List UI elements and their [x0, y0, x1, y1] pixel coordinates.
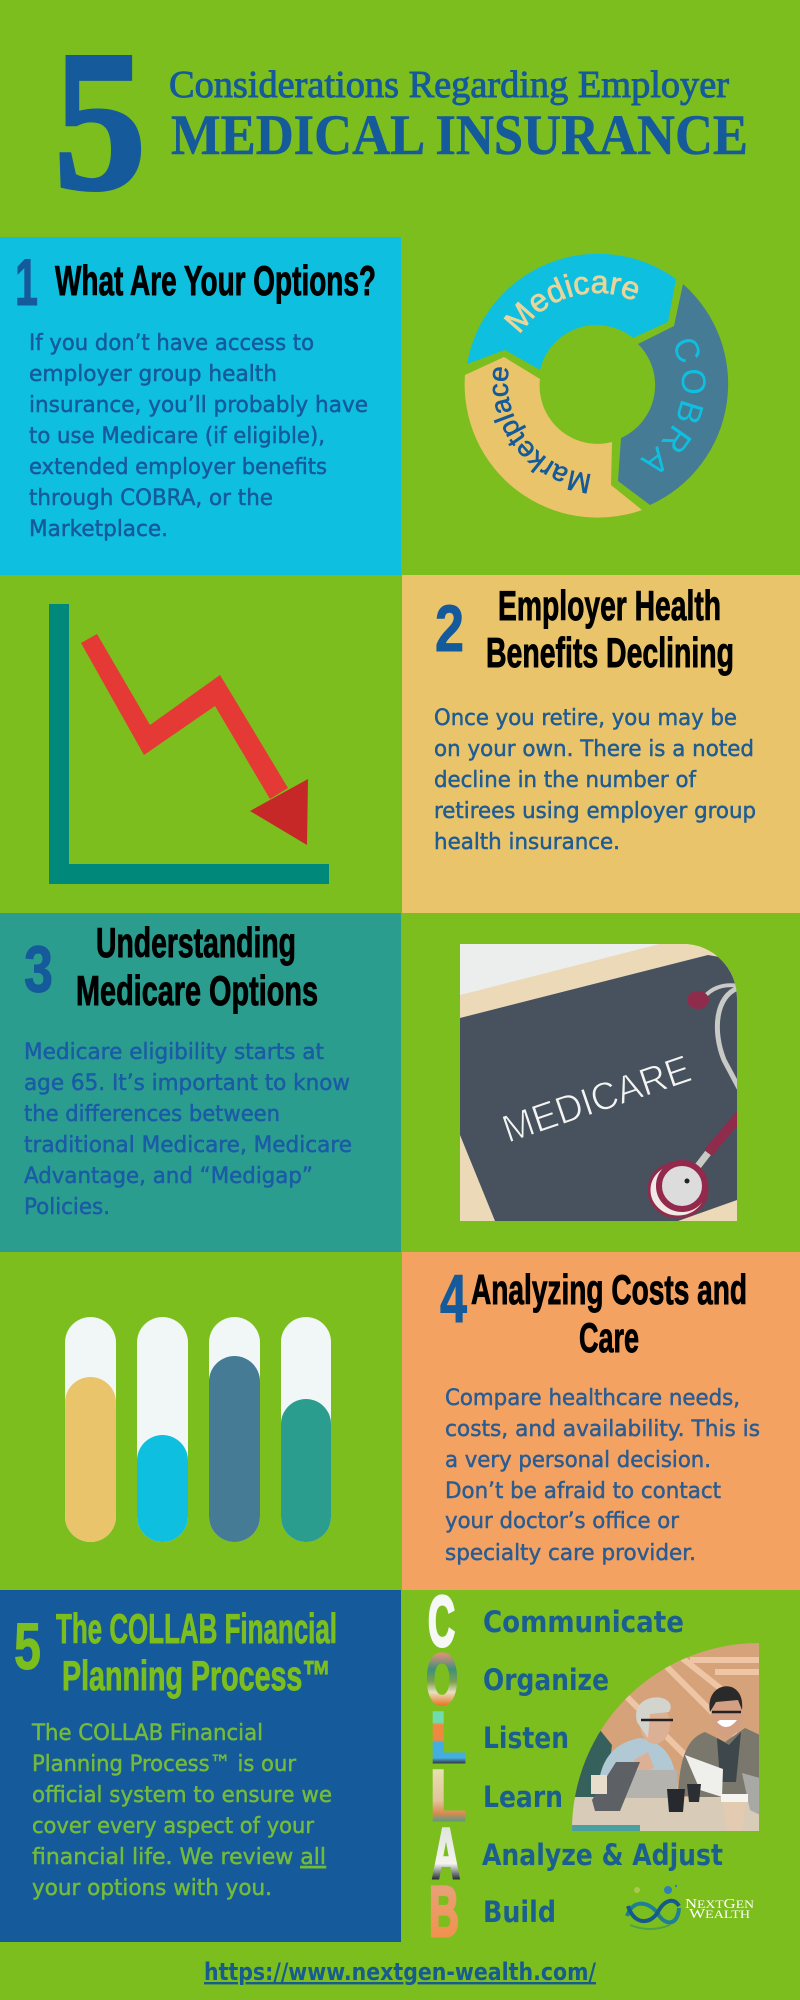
segment: cobra: [618, 284, 728, 505]
heading 5: [56, 1605, 337, 1699]
body text 3: [24, 1039, 352, 1220]
line chart: declining arrow: [49, 604, 329, 884]
laptops: [626, 1770, 677, 1798]
website link: https://www.nextgen-wealth.com/: [204, 1958, 596, 1986]
bar chart: four pill bars: [65, 1317, 331, 1542]
body text 4: Don’t be afraid to contact: [445, 1478, 721, 1504]
body text 1: Marketplace.: [29, 516, 168, 542]
heading 2: [486, 582, 734, 676]
heading 4: [471, 1266, 747, 1361]
title line: medical insurance: MEDICAL INSURANCE: [171, 104, 748, 167]
woman: [598, 1697, 678, 1790]
segment: marketplace: [464, 357, 642, 518]
body text 2: decline in the number of: [434, 767, 697, 793]
word: learn: Learn: [483, 1780, 563, 1814]
panel 5: the collab financial planning process: [0, 1590, 401, 1942]
number 2: 2: [435, 591, 464, 665]
letter A: A: [432, 1815, 460, 1894]
body text 3: the differences between: [24, 1101, 280, 1127]
chart axes: [49, 604, 329, 884]
document: [685, 1755, 723, 1797]
cups and holder: [591, 1775, 607, 1794]
body text 3: Advantage, and “Medigap”: [24, 1163, 313, 1189]
photo: medicare chalkboard with stethoscope: [460, 938, 760, 1221]
body text 5: Planning Process™ is our: [32, 1751, 297, 1777]
heading 3: [76, 919, 318, 1014]
body text 5: [31, 1720, 332, 1901]
word: organize: Organize: [483, 1663, 609, 1697]
heading 5: The COLLAB Financial: [56, 1605, 337, 1652]
body text 4: Compare healthcare needs,: [445, 1385, 740, 1411]
word: build: Build: [483, 1895, 556, 1929]
heading 1: What Are Your Options?: [55, 257, 376, 304]
wooden frame: [460, 938, 760, 1221]
number 4: 4: [440, 1261, 467, 1337]
bar fill 3: [209, 1356, 260, 1542]
arrow head: [250, 779, 308, 845]
word: listen: Listen: [483, 1721, 569, 1755]
cycle diagram: medicare, cobra, marketplace: [464, 254, 728, 518]
man: [678, 1686, 760, 1805]
heading 3: Understanding: [96, 919, 296, 966]
body text 1: insurance, you’ll probably have: [29, 392, 368, 418]
body text 4: specialty care provider.: [445, 1540, 696, 1566]
logo wordmark: NEXT GEN: [685, 1897, 755, 1912]
bar track 3: [209, 1317, 260, 1542]
body text 3: age 65. It’s important to know: [24, 1070, 350, 1096]
body text 5: cover every aspect of your: [32, 1813, 315, 1839]
body text 2: Once you retire, you may be: [434, 705, 737, 731]
big numeral 5: 5: [54, 11, 146, 232]
stethoscope: [649, 985, 740, 1217]
table: [572, 1797, 759, 1831]
bar fill 1: [65, 1377, 116, 1542]
body text 4: costs, and availability. This is: [445, 1416, 760, 1442]
heading 3: Medicare Options: [76, 967, 318, 1014]
word: analyze and adjust: Analyze & Adjust: [482, 1838, 723, 1872]
logo: nextgen wealth: W EALTH: [689, 1907, 750, 1922]
body text 1: [29, 330, 368, 542]
bar fill 4: [281, 1399, 331, 1542]
bar track 1: [65, 1317, 116, 1542]
body text 1: If you don’t have access to: [29, 330, 314, 356]
body text 5: financial life. We review all: [32, 1844, 326, 1870]
body text 4: [445, 1385, 760, 1566]
letter B: B: [429, 1873, 459, 1952]
body text 1: to use Medicare (if eligible),: [29, 423, 325, 449]
bar track 2: [137, 1317, 188, 1542]
panel 4: analyzing costs and care: [402, 1252, 800, 1590]
collab acronym list: [426, 1583, 723, 1952]
body text 5: official system to ensure we: [32, 1782, 332, 1808]
segment: medicare: Medicare: [504, 274, 638, 334]
number 1: 1: [15, 245, 38, 319]
body text 2: retirees using employer group: [434, 798, 756, 824]
body text 2: on your own. There is a noted: [434, 736, 754, 762]
panel 1: what are your options: [0, 237, 401, 575]
body text 3: Policies.: [24, 1194, 110, 1220]
body text 3: Medicare eligibility starts at: [24, 1039, 324, 1065]
body text 1: employer group health: [29, 361, 277, 387]
letter L: L: [430, 1699, 466, 1778]
logo: nextgen wealth: [627, 1885, 755, 1929]
number 3: 3: [24, 932, 53, 1006]
body text 4: your doctor’s office or: [445, 1508, 680, 1534]
body text 5: The COLLAB Financial: [31, 1720, 263, 1746]
body text 4: a very personal decision.: [445, 1447, 711, 1473]
wood stripes: [625, 1657, 759, 1758]
panel 3: understanding medicare options: [0, 913, 401, 1252]
bar track 4: [281, 1317, 331, 1542]
photo: two colleagues reviewing documents: [572, 1640, 760, 1831]
word: communicate: Communicate: [483, 1605, 684, 1639]
body text 1: extended employer benefits: [29, 454, 327, 480]
title line: considerations: Considerations Regarding Employer: [169, 64, 729, 106]
zigzag decline line: [81, 634, 288, 799]
segment: cobra: COBRA: [640, 339, 706, 472]
bar fill 2: [137, 1435, 188, 1542]
segment: medicare: [467, 254, 676, 370]
body text 3: traditional Medicare, Medicare: [24, 1132, 352, 1158]
logo mark: [627, 1885, 679, 1929]
window backdrop: [572, 1730, 612, 1800]
segment: marketplace: Marketplace: [492, 367, 590, 494]
heading 5: Planning Process™: [62, 1652, 331, 1699]
letter C: C: [428, 1583, 455, 1662]
body text 5: your options with you.: [32, 1875, 272, 1901]
heading 4: Care: [579, 1314, 639, 1361]
number 5: 5: [14, 1609, 41, 1683]
body text 2: health insurance.: [434, 829, 620, 855]
letter O: O: [426, 1641, 458, 1720]
body text 1: through COBRA, or the: [29, 485, 273, 511]
chalk word medicare: MEDICARE: [497, 1048, 696, 1152]
panel 2: employer health benefits declining: [402, 575, 800, 913]
letter L: L: [430, 1757, 466, 1836]
chalkboard: [460, 955, 737, 1221]
body text 2: [434, 705, 756, 855]
title: [54, 11, 748, 232]
